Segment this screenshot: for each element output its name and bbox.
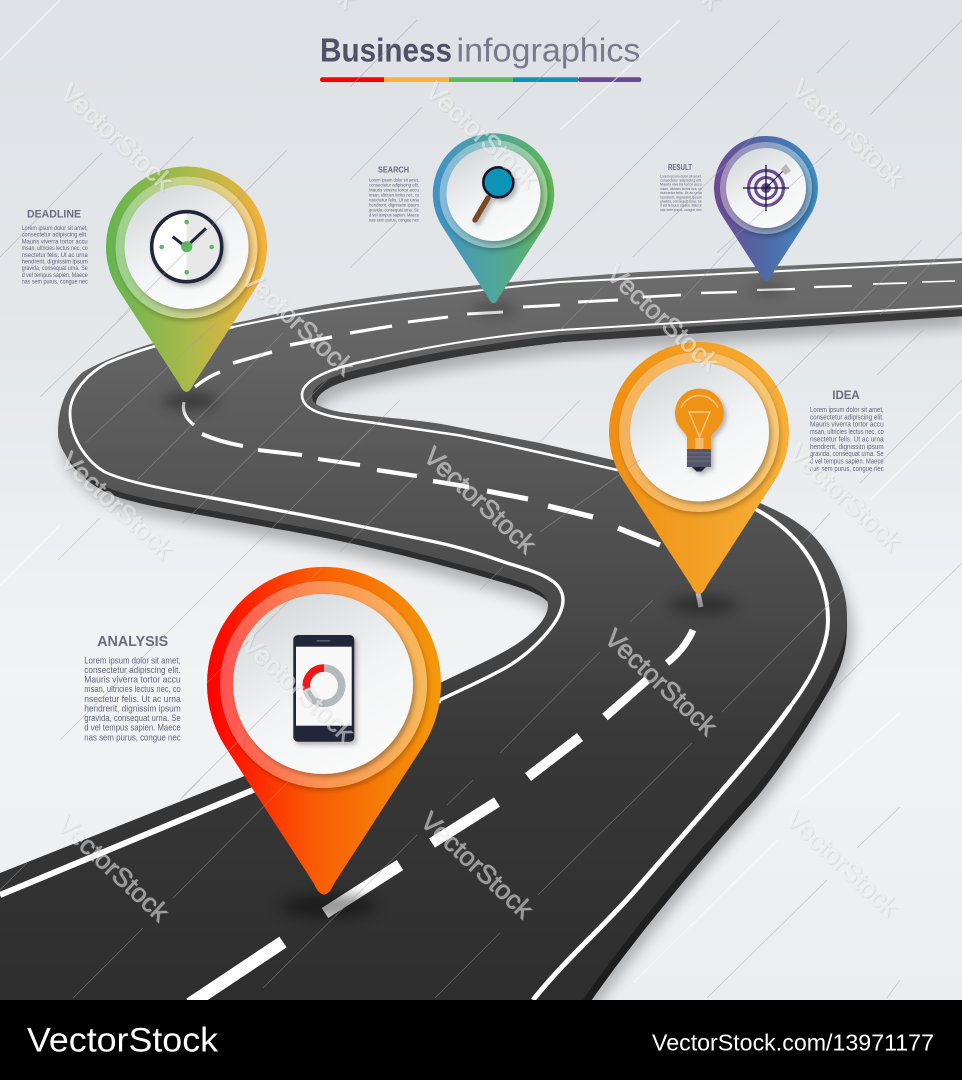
paragraph: search: Mauris viverra tortor accu	[369, 188, 419, 194]
watermarks: VectorStock	[599, 623, 724, 742]
paragraph: analysis: d vel tempus sapien. Maece	[84, 723, 181, 733]
pin body	[433, 133, 554, 303]
paragraph: deadline: hendrerit, dignissim ipsum	[22, 258, 88, 266]
paragraph: result: d vel tempus sapien. Maece	[660, 203, 702, 208]
pin: idea	[609, 342, 789, 594]
paragraph: analysis: nas sem purus, congue nec	[84, 732, 181, 742]
outer white edge line	[0, 262, 962, 895]
paragraph: idea: hendrerit, dignissim ipsum	[810, 444, 884, 451]
centre dashed line	[183, 281, 955, 1004]
paragraph: result: Mauris viverra tortor accu	[660, 182, 702, 187]
watermarks: VectorStock	[780, 804, 905, 923]
road side edge	[4, 265, 962, 1007]
pin body	[714, 136, 818, 282]
title word: Business: Business	[320, 32, 452, 68]
watermarks: VectorStock	[418, 441, 543, 560]
paragraph: deadline: d vel tempus sapien. Maece	[22, 272, 88, 279]
glass ring	[116, 176, 258, 318]
white disc	[124, 185, 248, 309]
paragraph: idea: msan, ultricies lectus nec, co	[810, 429, 884, 436]
paragraph: deadline: Lorem ipsum dolor sit amet,	[22, 225, 88, 232]
paragraph: result: consectetur adipiscing elit.	[660, 178, 702, 182]
watermarks: VectorStock	[415, 806, 540, 925]
watermarks: VectorStock	[236, 263, 361, 382]
paragraph: result: nsectetur felis. Ut ac urna	[660, 190, 702, 195]
text block: analysis	[84, 633, 181, 742]
paragraph: search: Lorem ipsum dolor sit amet,	[369, 178, 419, 184]
paragraph: analysis: nsectetur felis. Ut ac urna	[84, 694, 181, 704]
watermarks	[51, 0, 911, 928]
paragraph: analysis: msan, ultricies lectus nec, co	[84, 684, 181, 694]
colour bar	[320, 77, 642, 82]
paragraph: deadline: nsectetur felis. Ut ac urna	[22, 252, 88, 259]
pin: analysis	[207, 567, 441, 895]
paragraph: search: consectetur adipiscing elit.	[369, 183, 419, 189]
paragraph: search	[369, 178, 420, 224]
paragraph: analysis: Lorem ipsum dolor sit amet,	[84, 655, 181, 665]
heading: search: SEARCH	[378, 165, 409, 175]
paragraph: search: nas sem purus, congue nec	[369, 218, 420, 224]
heading: deadline: DEADLINE	[27, 209, 81, 221]
watermarks: VectorStock	[786, 74, 911, 193]
road	[0, 258, 962, 1018]
paragraph: search: hendrerit, dignissim ipsum	[369, 203, 419, 209]
watermarks: VectorStock	[420, 76, 545, 195]
heading: analysis: ANALYSIS	[97, 633, 168, 650]
paragraph: analysis: hendrerit, dignissim ipsum	[84, 704, 181, 714]
paragraph: analysis	[84, 655, 181, 742]
pin body	[609, 342, 789, 594]
pin: result	[714, 136, 818, 282]
paragraph: result	[660, 173, 702, 212]
white disc	[630, 362, 769, 502]
watermarks: VectorStock	[783, 438, 908, 557]
paragraph: analysis: gravida, consequat urna. Se	[84, 713, 181, 723]
paragraph: deadline: msan, ultricies lectus nec, co	[22, 245, 88, 252]
paragraph: deadline: Mauris viverra tortor accu	[22, 238, 88, 245]
pin ground shadows	[162, 286, 786, 918]
white disc	[233, 594, 413, 774]
footer bar	[0, 1000, 962, 1080]
watermarks: VectorStock	[55, 78, 180, 197]
paragraph: idea	[810, 407, 884, 473]
text block: result	[660, 163, 702, 212]
glass ring	[440, 140, 548, 248]
pin: deadline	[106, 166, 267, 392]
icon: target	[743, 164, 791, 211]
pin body	[207, 567, 441, 895]
glass ring	[619, 352, 779, 512]
glass ring	[220, 581, 427, 788]
paragraph: result: nas sem purus, congue nec	[660, 207, 702, 212]
text block: search	[369, 165, 420, 224]
icon: clock	[152, 212, 222, 282]
watermarks: VectorStock	[236, 629, 361, 748]
footer image id: VectorStock.com/13971177	[652, 1030, 934, 1056]
paragraph: result: hendrerit, dignissim ipsum	[660, 194, 702, 199]
title word: infographics: infographics	[456, 32, 640, 68]
watermarks: VectorStock	[601, 259, 726, 378]
paragraph: result: msan, ultricies lectus nec, co	[660, 186, 702, 191]
paragraph: idea: d vel tempus sapien. Maece	[810, 458, 884, 465]
text block: idea	[810, 388, 884, 473]
paragraph: search: nsectetur felis. Ut ac urna	[369, 198, 419, 204]
paragraph: deadline	[22, 225, 88, 286]
paragraph: idea: gravida, consequat urna. Se	[810, 451, 884, 458]
paragraph: deadline: consectetur adipiscing elit.	[22, 232, 88, 239]
paragraph: search: gravida, consequat urna. Se	[369, 208, 419, 214]
footer brand: VectorStock	[27, 1022, 219, 1060]
paragraph: idea: nsectetur felis. Ut ac urna	[810, 436, 884, 443]
watermarks: VectorStock	[51, 809, 176, 928]
paragraph: search: msan, ultricies lectus nec, co	[369, 193, 419, 199]
heading: result: RESULT	[668, 163, 692, 172]
paragraph: result: gravida, consequat urna. Se	[660, 198, 702, 204]
icon: magnifying glass	[475, 167, 513, 220]
paragraph: analysis: consectetur adipiscing elit.	[84, 665, 181, 675]
watermarks: VectorStock	[55, 446, 180, 565]
icon: light bulb	[675, 389, 724, 472]
pin body	[106, 166, 267, 392]
glass ring	[720, 142, 812, 234]
paragraph: idea: consectetur adipiscing elit.	[810, 414, 884, 421]
white disc	[726, 148, 806, 228]
icon: smartphone with donut chart	[293, 635, 354, 742]
inner white edge line	[302, 306, 962, 1000]
paragraph: result: Lorem ipsum dolor sit amet,	[660, 173, 702, 178]
title	[320, 32, 642, 82]
pin: search	[433, 133, 554, 303]
paragraph: idea: Mauris viverra tortor accu	[810, 422, 884, 429]
road surface	[0, 258, 962, 1000]
text block: deadline	[22, 209, 88, 286]
white disc	[446, 147, 540, 241]
paragraph: analysis: Mauris viverra tortor accu	[84, 675, 181, 685]
paragraph: deadline: nas sem purus, congue nec	[22, 279, 88, 286]
paragraph: deadline: gravida, consequat urna. Se	[22, 265, 88, 272]
paragraph: search: d vel tempus sapien. Maece	[369, 213, 419, 219]
road shadow	[6, 276, 962, 1018]
paragraph: idea: nas sem purus, congue nec	[810, 466, 884, 473]
heading: idea: IDEA	[832, 388, 860, 402]
paragraph: idea: Lorem ipsum dolor sit amet,	[810, 407, 884, 414]
